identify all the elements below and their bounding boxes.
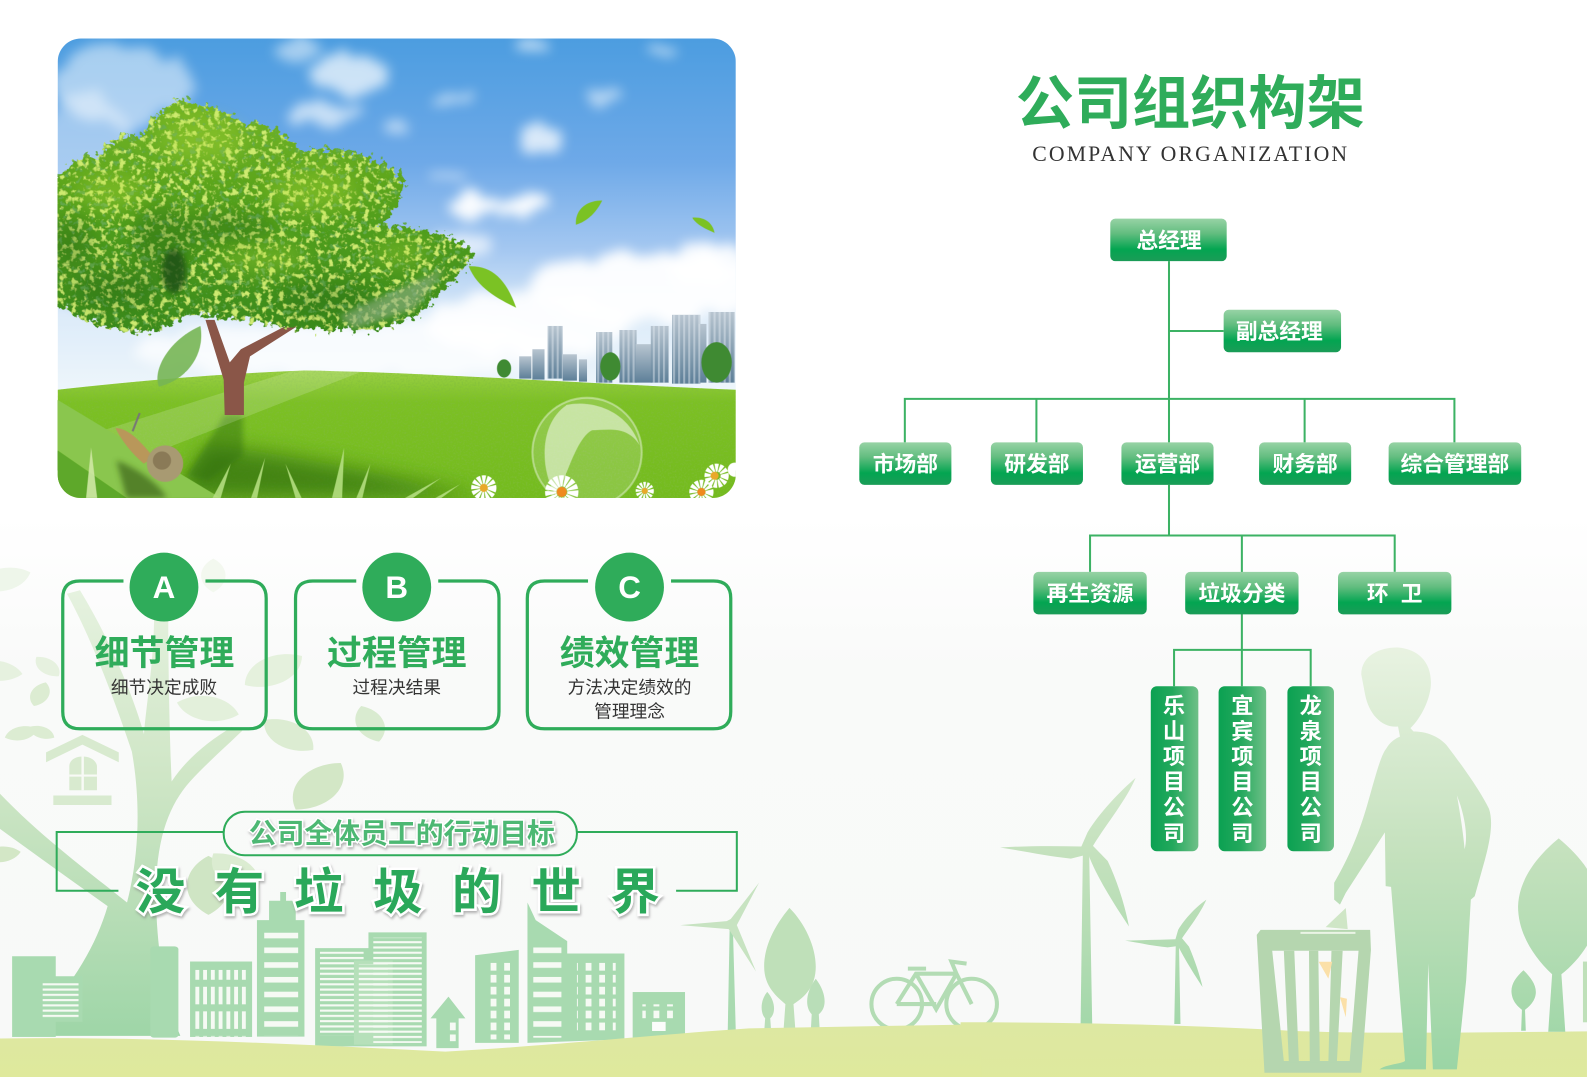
- trash can: [1257, 908, 1371, 1073]
- banner frame: [57, 832, 737, 891]
- department: R&D: [991, 442, 1083, 485]
- icon: floating leaves: [157, 200, 715, 387]
- wind turbine: [680, 883, 759, 1032]
- icon: bicycle: [871, 962, 997, 1029]
- department: general administration: [1389, 442, 1521, 485]
- card C text: 管理理念: [594, 701, 665, 722]
- project: Yibin: 目: [1231, 770, 1253, 795]
- banner: company goal: [57, 812, 737, 920]
- unit: waste sorting: 垃圾分类: [1198, 581, 1286, 606]
- card B frame: [296, 581, 499, 729]
- wind turbine large: [1000, 778, 1136, 1024]
- far-right tree edge: [1583, 962, 1587, 1022]
- banner subtitle: 公司全体员工的行动目标: [249, 818, 555, 849]
- project: Yibin: 项: [1231, 744, 1253, 769]
- unit: recycling: [1033, 572, 1147, 614]
- department: general administration: 综合管理部: [1401, 452, 1510, 477]
- project: Longquan: 泉: [1300, 719, 1322, 744]
- project: Yibin: 公: [1231, 795, 1253, 820]
- icon: daisies: [470, 462, 736, 498]
- card A: [63, 553, 266, 729]
- crown light patches: [76, 119, 430, 272]
- translucent branch tip: [339, 268, 445, 329]
- card C heading: 绩效管理: [560, 634, 699, 673]
- badge A: [130, 553, 198, 621]
- card C frame: [527, 581, 731, 729]
- title: 公司组织构架: [1016, 72, 1365, 137]
- project: Yibin: [1219, 686, 1266, 851]
- card B heading: 过程管理: [327, 634, 467, 673]
- distant city: [519, 312, 735, 384]
- unit: recycling: 再生资源: [1047, 581, 1134, 606]
- grass field: [58, 370, 736, 498]
- level 1: deputy general manager: [1224, 310, 1341, 352]
- project: Longquan: 项: [1300, 744, 1322, 769]
- card A frame: [63, 581, 266, 729]
- icon: glass globe: [532, 398, 642, 507]
- crown shade patches: [49, 208, 380, 313]
- project: Leshan: 山: [1163, 719, 1185, 744]
- card B: [296, 553, 499, 729]
- card C: [527, 553, 731, 729]
- person silhouette: [1334, 647, 1491, 1069]
- project: Longquan: 司: [1300, 821, 1322, 846]
- level 1: general manager: 总经理: [1136, 228, 1202, 253]
- tree trunk: [205, 320, 298, 415]
- project: Longquan: 公: [1300, 795, 1322, 820]
- project: Leshan: 公: [1163, 795, 1185, 820]
- banner headline: 没有垃圾的世界: [136, 864, 660, 920]
- department: R&D: 研发部: [1004, 452, 1070, 477]
- department: operations: [1121, 442, 1214, 485]
- card A heading: 细节管理: [95, 634, 234, 673]
- crown hollow: [162, 249, 186, 294]
- subtitle: COMPANY ORGANIZATION: [1032, 142, 1349, 166]
- badge C: [595, 553, 664, 621]
- grass grain: [58, 364, 736, 498]
- foreground grass blades: [86, 447, 461, 498]
- tree crown: [51, 100, 474, 332]
- department: market: 市场部: [873, 452, 938, 477]
- badge C: C: [618, 570, 641, 605]
- panel: landscape photo: [40, 39, 769, 507]
- project: Yibin: 宾: [1231, 719, 1253, 744]
- project: Leshan: 目: [1163, 770, 1185, 795]
- tree silhouette: [0, 590, 242, 1036]
- project: Leshan: 司: [1163, 821, 1185, 846]
- hill: [961, 1022, 1587, 1077]
- banner pill: [224, 812, 577, 855]
- badge A: A: [153, 570, 175, 605]
- illustration: wind turbine, small trees and bicycle: [680, 883, 997, 1032]
- field shadow: [172, 445, 486, 498]
- sky: [58, 39, 736, 393]
- level 1: deputy general manager: 副总经理: [1236, 319, 1323, 344]
- department: finance: 财务部: [1273, 452, 1338, 477]
- wind turbine small: [1125, 900, 1206, 1024]
- foreground blade of grass: [58, 400, 221, 498]
- unit: sanitation: 环 卫: [1367, 581, 1422, 606]
- project: Yibin: 司: [1231, 821, 1253, 846]
- level 1: general manager: [1110, 219, 1227, 261]
- project: Longquan: 目: [1300, 770, 1322, 795]
- small trees in city: [497, 342, 732, 383]
- icon: snail: [115, 413, 183, 482]
- unit: waste sorting: [1185, 572, 1299, 614]
- department: finance: [1259, 442, 1351, 485]
- card C text: 方法决定绩效的: [568, 677, 691, 697]
- leaf tree: [762, 908, 825, 1032]
- project: Leshan: 项: [1163, 744, 1185, 769]
- project: Leshan: 乐: [1163, 694, 1185, 719]
- background leaves: [0, 559, 392, 915]
- badge B: [362, 553, 431, 621]
- illustration: left tree, leaves and house: [0, 559, 685, 1048]
- department: market: [859, 442, 951, 485]
- card C text: [568, 677, 691, 722]
- project: Leshan: [1151, 686, 1198, 851]
- badge B: B: [385, 570, 408, 605]
- left ground hill: [0, 1024, 982, 1077]
- light beam: [106, 370, 360, 453]
- card B text: 过程决结果: [352, 677, 441, 697]
- building group: [12, 892, 685, 1048]
- small tree: [1511, 970, 1536, 1031]
- arm gap: [1457, 795, 1466, 849]
- clouds: [40, 39, 769, 378]
- unit: sanitation: [1338, 572, 1451, 614]
- org chart: [859, 219, 1521, 851]
- department: operations: 运营部: [1135, 452, 1200, 477]
- connector lines: [905, 261, 1454, 686]
- card A text: 细节决定成败: [111, 677, 217, 697]
- project: Longquan: 龙: [1300, 694, 1322, 719]
- big leaf tree: [1518, 838, 1587, 1032]
- icon: house: [46, 735, 119, 805]
- left city skyline: [12, 892, 685, 1048]
- project: Longquan: [1287, 686, 1334, 851]
- project: Yibin: 宜: [1231, 694, 1253, 719]
- illustration: right scene: [961, 647, 1587, 1077]
